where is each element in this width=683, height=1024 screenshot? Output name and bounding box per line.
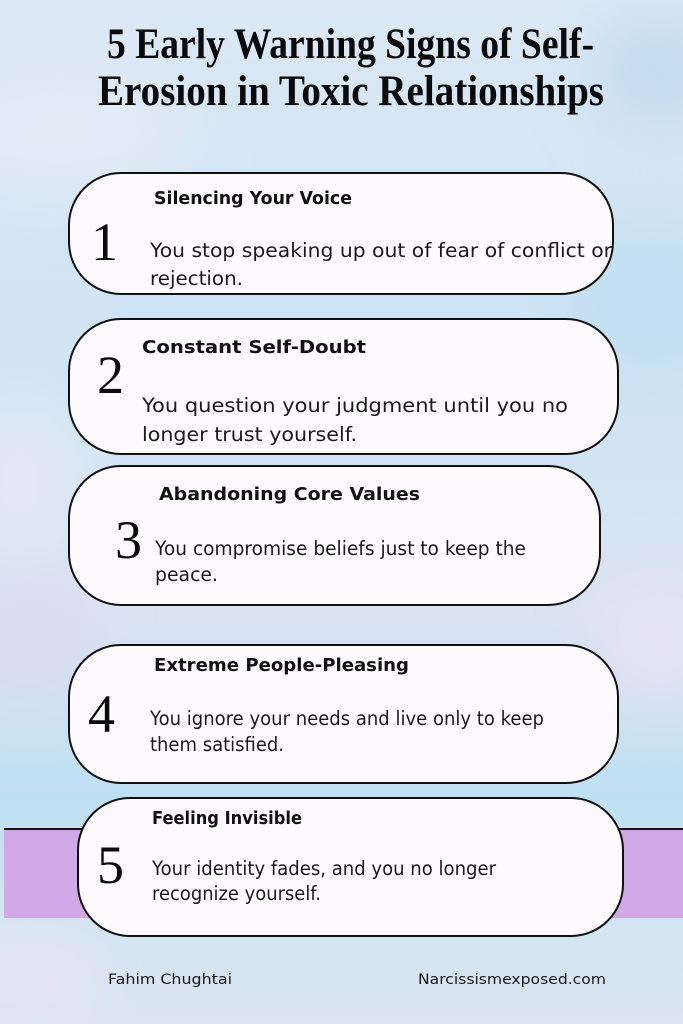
body 1	[149, 239, 613, 290]
body 1: You stop speaking up out of fear of conflict or	[149, 239, 613, 262]
number 2: 2	[97, 345, 124, 405]
body 2: You question your judgment until you no	[141, 394, 568, 417]
number 3: 3	[115, 510, 142, 570]
body 5: recognize yourself.	[152, 882, 321, 905]
footer: website: Narcissismexposed.com	[418, 972, 606, 988]
purple band	[4, 828, 683, 918]
body 3: You compromise beliefs just to keep the	[154, 537, 526, 560]
card 4: extreme people-pleasing	[69, 645, 618, 783]
number 5: 5	[97, 835, 124, 895]
heading 2: Constant Self-Doubt	[142, 337, 366, 358]
card 5: feeling invisible	[78, 798, 623, 936]
body 3: peace.	[155, 563, 218, 586]
card 2: constant self-doubt	[69, 319, 618, 454]
body 2: longer trust yourself.	[142, 423, 357, 446]
number 4: 4	[88, 684, 115, 744]
title	[98, 21, 604, 115]
body 5: Your identity fades, and you no longer	[151, 857, 497, 880]
body 4: them satisfied.	[150, 733, 284, 756]
body 4	[149, 707, 544, 756]
heading 1: Silencing Your Voice	[154, 188, 352, 209]
number 1: 1	[91, 212, 118, 272]
body 4: You ignore your needs and live only to keep	[149, 707, 544, 730]
body 1: rejection.	[150, 267, 243, 290]
title: Erosion in Toxic Relationships	[98, 68, 604, 115]
card 3: abandoning core values	[69, 466, 600, 605]
card 1: silencing your voice	[69, 173, 613, 294]
heading 5: Feeling Invisible	[152, 808, 302, 829]
footer: author: Fahim Chughtai	[108, 972, 232, 988]
body 2	[141, 394, 568, 446]
heading 3: Abandoning Core Values	[159, 484, 420, 505]
heading 4: Extreme People-Pleasing	[154, 655, 409, 676]
body 3	[154, 537, 526, 586]
title: 5 Early Warning Signs of Self-	[107, 21, 594, 68]
body 5	[151, 857, 497, 905]
